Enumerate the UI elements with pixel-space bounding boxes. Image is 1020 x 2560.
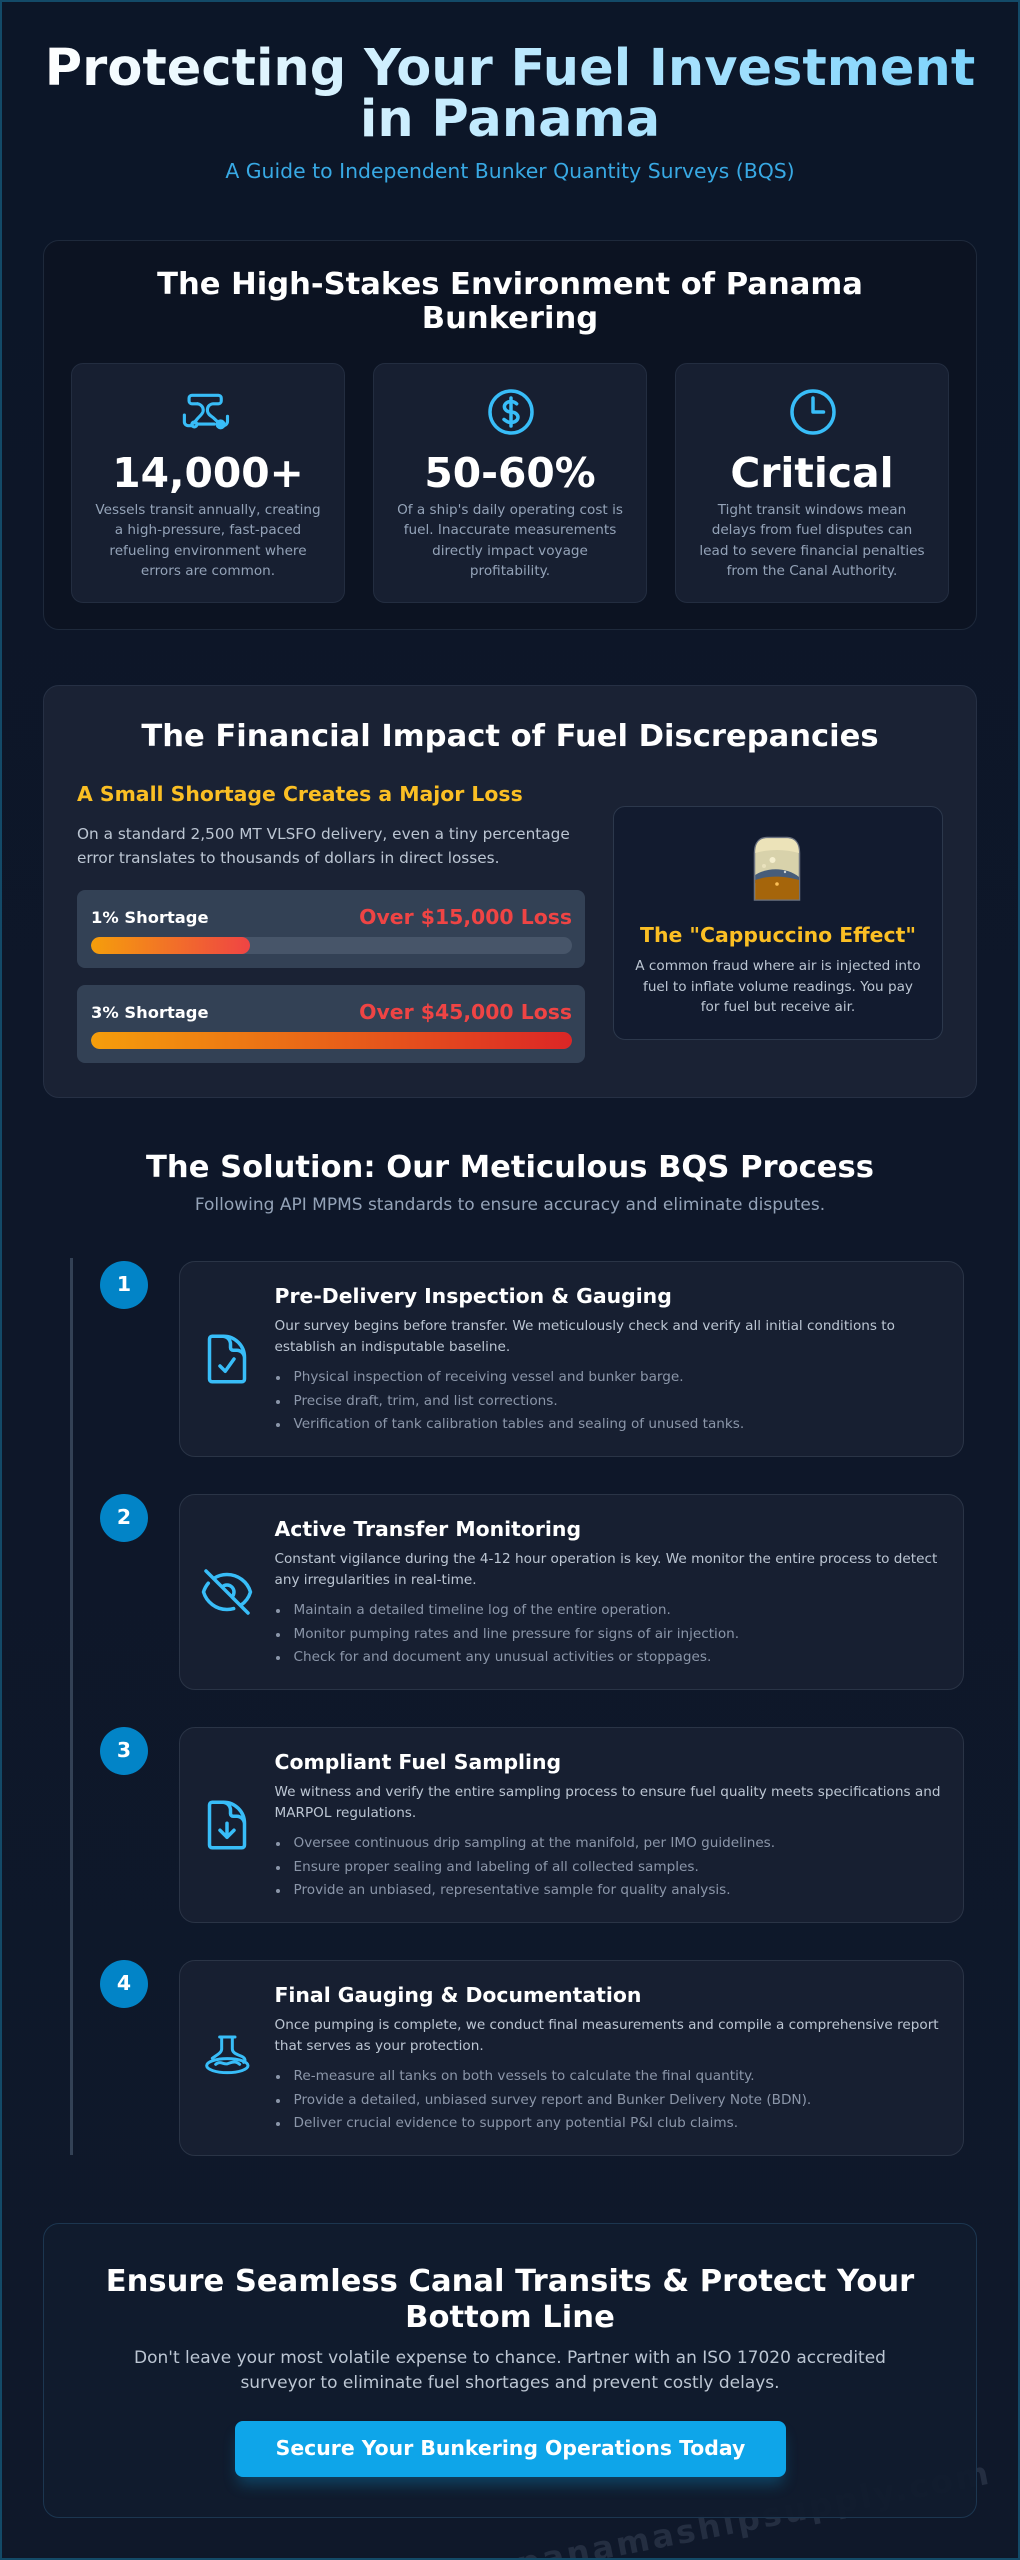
step bullets: [276, 1602, 739, 1665]
step 1 number: 1: [117, 1272, 131, 1296]
step 4 card: [179, 1960, 964, 2156]
stat: 50-60%: [424, 449, 596, 497]
stat: Critical: [730, 449, 894, 497]
bar track: [91, 1032, 572, 1049]
button: [235, 2421, 786, 2477]
paragraph: [77, 825, 570, 867]
description: errors are common.: [141, 563, 275, 579]
description: a high-pressure, fast-paced: [115, 522, 301, 538]
description: refueling environment where: [109, 543, 307, 559]
subheading: A Small Shortage Creates a Major Loss: [77, 782, 523, 806]
header: [45, 39, 975, 183]
step bullets: Monitor pumping rates and line pressure for signs of air injection.: [294, 1626, 739, 1642]
card: critical: [675, 363, 949, 603]
heading: [157, 267, 863, 336]
step bullets: Verification of tank calibration tables and sealing of unused tanks.: [294, 1416, 744, 1432]
heading: Bunkering: [422, 301, 598, 336]
icon: document download: [208, 1800, 246, 1850]
title: Protecting Your Fuel Investment: [45, 39, 975, 98]
step text: Constant vigilance during the 4-12 hour operation is key. We monitor the entire process to detect: [274, 1551, 937, 1567]
card text: for fuel but receive air.: [701, 999, 855, 1015]
heading: Bottom Line: [405, 2300, 615, 2335]
icon: document check: [208, 1334, 246, 1384]
icon: flask: [205, 2036, 250, 2074]
panel: financial impact: [43, 685, 977, 1098]
step text: Our survey begins before transfer. We meticulously check and verify all initial conditions to: [274, 1318, 895, 1334]
step 4 number: 4: [117, 1971, 131, 1995]
step 3 number: [100, 1727, 148, 1775]
step bullets: Deliver crucial evidence to support any potential P&I club claims.: [294, 2115, 738, 2131]
card: vessels transit: [71, 363, 345, 603]
subtitle: A Guide to Independent Bunker Quantity Surveys (BQS): [225, 159, 795, 183]
step 2 card: [179, 1494, 964, 1690]
button: Secure Your Bunkering Operations Today: [276, 2436, 745, 2460]
paragraph: surveyor to eliminate fuel shortages and prevent costly delays.: [240, 2372, 780, 2392]
card: cappuccino effect: [613, 806, 943, 1040]
card text: fuel to inflate volume readings. You pay: [643, 978, 913, 994]
step bullets: Maintain a detailed timeline log of the entire operation.: [294, 1602, 671, 1618]
step text: establish an indisputable baseline.: [274, 1338, 510, 1354]
step bullets: Physical inspection of receiving vessel and bunker barge.: [294, 1369, 684, 1385]
step 3 card: [179, 1727, 964, 1923]
step text: [274, 1318, 895, 1354]
step 1 card: [179, 1261, 964, 1457]
description: fuel. Inaccurate measurements: [404, 522, 616, 538]
paragraph: Don't leave your most volatile expense to chance. Partner with an ISO 17020 accredited: [134, 2348, 886, 2368]
step bullets: [276, 2068, 811, 2131]
description: [699, 502, 925, 579]
step text: any irregularities in real-time.: [274, 1572, 477, 1588]
description: Tight transit windows mean: [718, 502, 906, 518]
icon: eye slash: [202, 1569, 252, 1615]
card title: The "Cappuccino Effect": [640, 923, 916, 947]
timeline line: [70, 1258, 73, 2155]
heading: The High-Stakes Environment of Panama: [157, 267, 863, 302]
icon: dollar: [488, 389, 534, 435]
step title: Pre-Delivery Inspection & Gauging: [274, 1284, 672, 1308]
step bullets: Precise draft, trim, and list corrections.: [294, 1393, 558, 1409]
icon: canal transit: [182, 394, 230, 430]
step text: MARPOL regulations.: [274, 1804, 416, 1820]
heading: [106, 2264, 914, 2335]
description: [397, 502, 623, 579]
step bullets: Oversee continuous drip sampling at the manifold, per IMO guidelines.: [294, 1835, 775, 1851]
loss value: Over $15,000 Loss: [359, 905, 572, 929]
loss value: Over $45,000 Loss: [359, 1000, 572, 1024]
heading: Ensure Seamless Canal Transits & Protect Your: [106, 2264, 914, 2299]
title: [40, 43, 980, 145]
description: delays from fuel disputes can: [712, 522, 912, 538]
step title: Active Transfer Monitoring: [274, 1517, 581, 1541]
step bullets: [276, 1835, 775, 1898]
step 2 number: [100, 1494, 148, 1542]
card text: A common fraud where air is injected into: [635, 958, 921, 974]
bar: 3% shortage: [77, 985, 585, 1063]
description: lead to severe financial penalties: [699, 543, 925, 559]
label: 3% Shortage: [91, 1003, 209, 1022]
step 3 number: 3: [117, 1738, 131, 1762]
step bullets: Ensure proper sealing and labeling of all collected samples.: [294, 1859, 699, 1875]
step bullets: Provide a detailed, unbiased survey report and Bunker Delivery Note (BDN).: [294, 2092, 811, 2108]
description: Vessels transit annually, creating: [95, 502, 321, 518]
step 1 number: [100, 1261, 148, 1309]
panel: high-stakes environment: [43, 240, 977, 630]
panel: call to action: [43, 2223, 977, 2518]
section: solution process: [70, 1150, 964, 2156]
paragraph: [134, 2348, 886, 2392]
step text: Once pumping is complete, we conduct final measurements and compile a comprehensive report: [274, 2017, 939, 2033]
icon: fuel tank: [754, 836, 800, 901]
step bullets: Provide an unbiased, representative sample for quality analysis.: [294, 1882, 731, 1898]
step text: [274, 1551, 937, 1588]
heading: The Solution: Our Meticulous BQS Process: [146, 1150, 874, 1185]
step bullets: Re-measure all tanks on both vessels to calculate the final quantity.: [294, 2068, 755, 2084]
step bullets: Check for and document any unusual activities or stoppages.: [294, 1649, 711, 1665]
step text: We witness and verify the entire sampling process to ensure fuel quality meets specifications and: [274, 1784, 940, 1800]
icon: clock: [790, 389, 836, 435]
description: directly impact voyage: [432, 543, 588, 559]
paragraph: error translates to thousands of dollars in direct losses.: [77, 849, 500, 867]
paragraph: On a standard 2,500 MT VLSFO delivery, even a tiny percentage: [77, 825, 570, 843]
bar: 1% shortage: [77, 890, 585, 968]
heading: The Financial Impact of Fuel Discrepancies: [141, 719, 879, 754]
step title: Compliant Fuel Sampling: [274, 1750, 561, 1774]
subheading: Following API MPMS standards to ensure accuracy and eliminate disputes.: [195, 1195, 825, 1215]
description: [95, 502, 321, 579]
stat: 14,000+: [112, 449, 304, 497]
step 4 number: [100, 1960, 148, 2008]
step title: Final Gauging & Documentation: [274, 1983, 641, 2007]
step text: [274, 2017, 939, 2054]
title: in Panama: [360, 90, 660, 149]
step text: [274, 1784, 940, 1820]
step bullets: [276, 1369, 744, 1432]
step text: that serves as your protection.: [274, 2038, 484, 2054]
card text: [635, 958, 921, 1015]
description: from the Canal Authority.: [727, 563, 897, 579]
step 2 number: 2: [117, 1505, 131, 1529]
card: fuel cost: [373, 363, 647, 603]
description: Of a ship's daily operating cost is: [397, 502, 623, 518]
description: profitability.: [470, 563, 550, 579]
label: 1% Shortage: [91, 908, 209, 927]
bar track: [91, 937, 572, 954]
